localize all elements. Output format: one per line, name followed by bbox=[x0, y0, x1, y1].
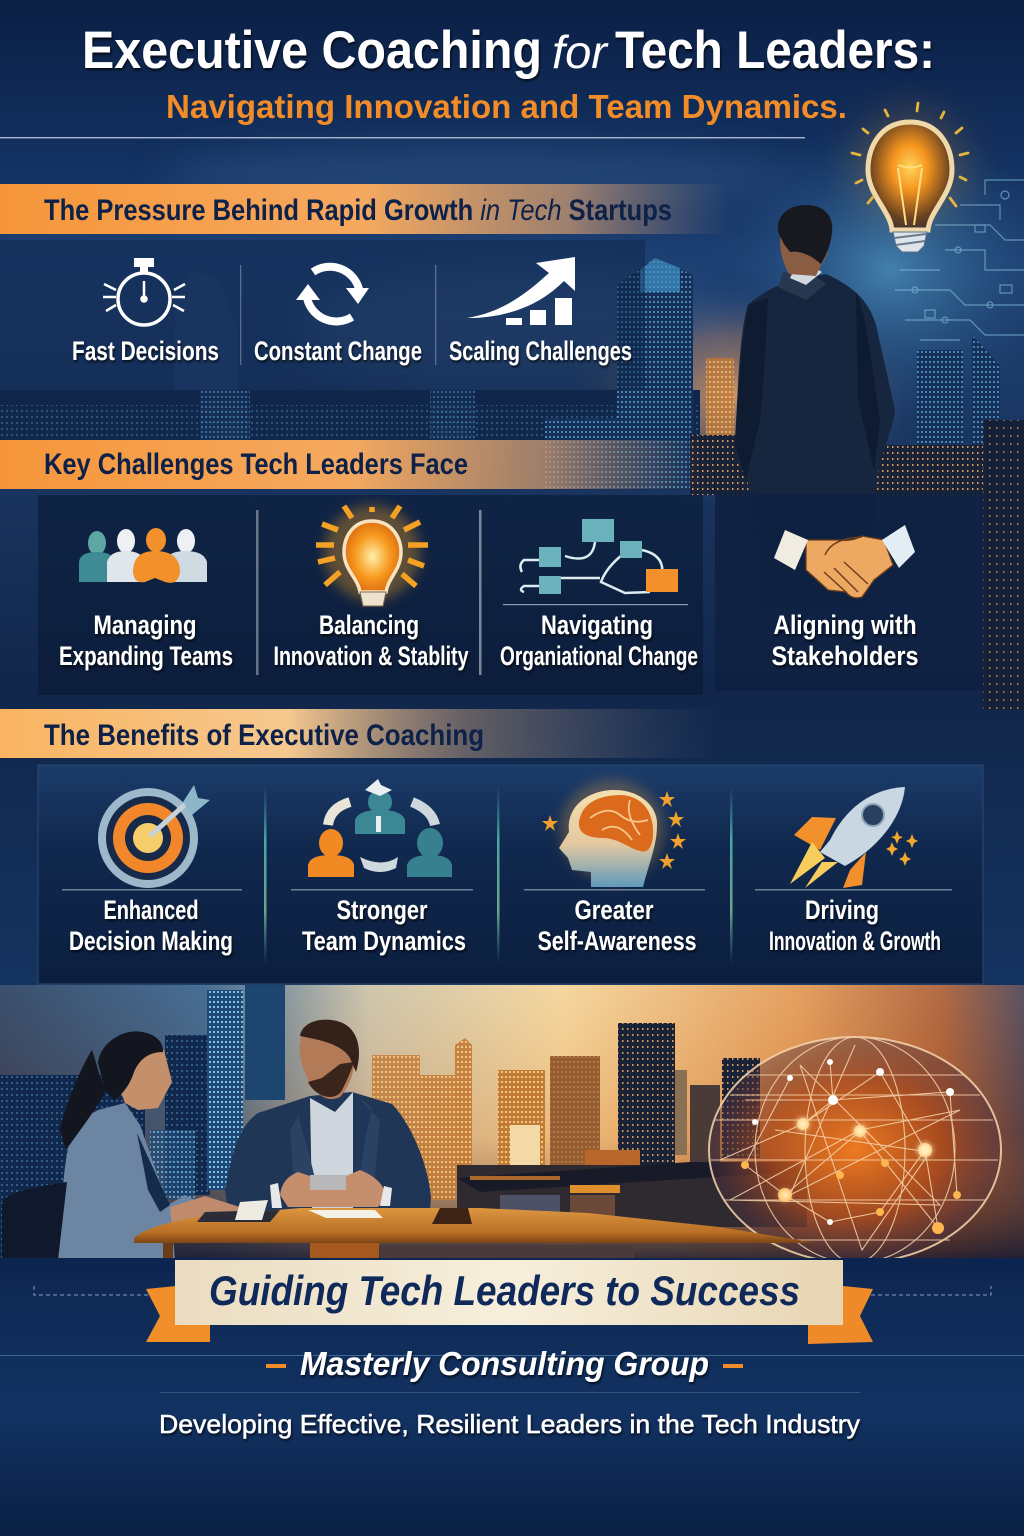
ribbon text: Guiding Tech Leaders to Success bbox=[209, 1267, 800, 1314]
panel: challenges bbox=[38, 493, 983, 695]
icon: stopwatch bbox=[103, 258, 185, 325]
label: greater self-awareness: Greater bbox=[574, 895, 654, 925]
banner: pressure bbox=[0, 184, 730, 234]
icon: lightbulb bbox=[852, 103, 968, 252]
label: balancing innovation and stability: Innovation & Stablity bbox=[274, 641, 468, 671]
icon: team people bbox=[79, 528, 207, 583]
title: Executive Coaching bbox=[82, 21, 542, 80]
table bbox=[134, 1208, 817, 1243]
title: Tech Leaders: bbox=[615, 21, 935, 80]
label: greater self-awareness: Self-Awareness bbox=[538, 926, 696, 956]
background: circuit lines bbox=[895, 180, 1024, 340]
centre city buildings bbox=[372, 1023, 760, 1200]
bridge and water bbox=[457, 1162, 807, 1227]
man in suit bbox=[225, 1020, 431, 1210]
divider line bbox=[0, 137, 805, 138]
label: stronger team dynamics: Team Dynamics bbox=[302, 926, 466, 956]
icon: team dynamics bbox=[308, 779, 452, 877]
label: navigating organisational change: Organiational Change bbox=[500, 641, 698, 671]
label: driving innovation and growth: Driving bbox=[805, 895, 879, 925]
icon: target bbox=[98, 785, 210, 888]
icon: glowing bulb bbox=[316, 505, 428, 606]
label: enhanced decision making: Enhanced bbox=[104, 895, 198, 925]
label: enhanced decision making: Decision Making bbox=[69, 926, 233, 956]
label: stronger team dynamics: Stronger bbox=[336, 895, 428, 925]
table legs bbox=[163, 1243, 634, 1260]
footer fade bbox=[0, 1258, 1024, 1272]
figure: businessman from behind bbox=[735, 205, 895, 605]
label: aligning with stakeholders: Stakeholders bbox=[772, 641, 918, 671]
label: managing expanding teams: Expanding Teams bbox=[59, 641, 233, 671]
banner: challenges bbox=[0, 440, 700, 489]
ribbon body bbox=[175, 1260, 843, 1325]
scene sky bbox=[0, 985, 1024, 1260]
ribbon banner bbox=[146, 1260, 873, 1344]
panel: pressure bbox=[0, 240, 645, 390]
banner: benefits bbox=[0, 709, 720, 758]
icon: head with brain bbox=[542, 780, 686, 887]
globe network bbox=[709, 1037, 1001, 1263]
scene sky shading bbox=[0, 985, 1024, 1260]
icon: handshake bbox=[774, 525, 915, 598]
subtitle: Navigating Innovation and Team Dynamics. bbox=[166, 88, 847, 125]
divider line bbox=[160, 1392, 860, 1393]
chair bbox=[2, 1182, 67, 1260]
company name: Masterly Consulting Group bbox=[300, 1345, 709, 1382]
label: navigating organisational change: Navigating bbox=[541, 610, 653, 640]
icon: organisation flow diagram bbox=[503, 519, 688, 605]
icon: cycle arrows bbox=[296, 267, 369, 321]
woman in blazer bbox=[55, 1031, 243, 1260]
label: aligning with stakeholders: Aligning with bbox=[774, 610, 916, 640]
background: clouds and glow bbox=[160, 120, 1024, 505]
label: fast decisions: Fast Decisions bbox=[72, 336, 219, 366]
label: managing expanding teams: Managing bbox=[94, 610, 196, 640]
background: upper city skyline bbox=[0, 258, 1024, 710]
label: constant change: Constant Change bbox=[254, 336, 422, 366]
icon: rocket bbox=[790, 787, 918, 888]
banner: pressure: The Pressure Behind Rapid Growth in Tech Startups bbox=[44, 194, 672, 227]
divider line bbox=[0, 1355, 1024, 1356]
banner: challenges: Key Challenges Tech Leaders Face bbox=[44, 448, 468, 481]
dashed accent lines bbox=[34, 1286, 991, 1295]
notebook and papers bbox=[197, 1200, 472, 1224]
icon: growth arrow with bars bbox=[467, 257, 575, 325]
scene: coaching meeting with city skyline bbox=[0, 985, 1024, 1263]
label: balancing innovation and stability: Balancing bbox=[319, 610, 419, 640]
label: scaling challenges: Scaling Challenges bbox=[449, 336, 632, 366]
tagline: Developing Effective, Resilient Leaders in the Tech Industry bbox=[159, 1409, 860, 1439]
ribbon tails bbox=[146, 1286, 873, 1344]
panel: benefits bbox=[38, 765, 983, 984]
left city buildings bbox=[0, 985, 285, 1260]
title: for bbox=[552, 26, 609, 78]
title bbox=[82, 21, 935, 80]
banner: benefits: The Benefits of Executive Coaching bbox=[44, 719, 484, 752]
